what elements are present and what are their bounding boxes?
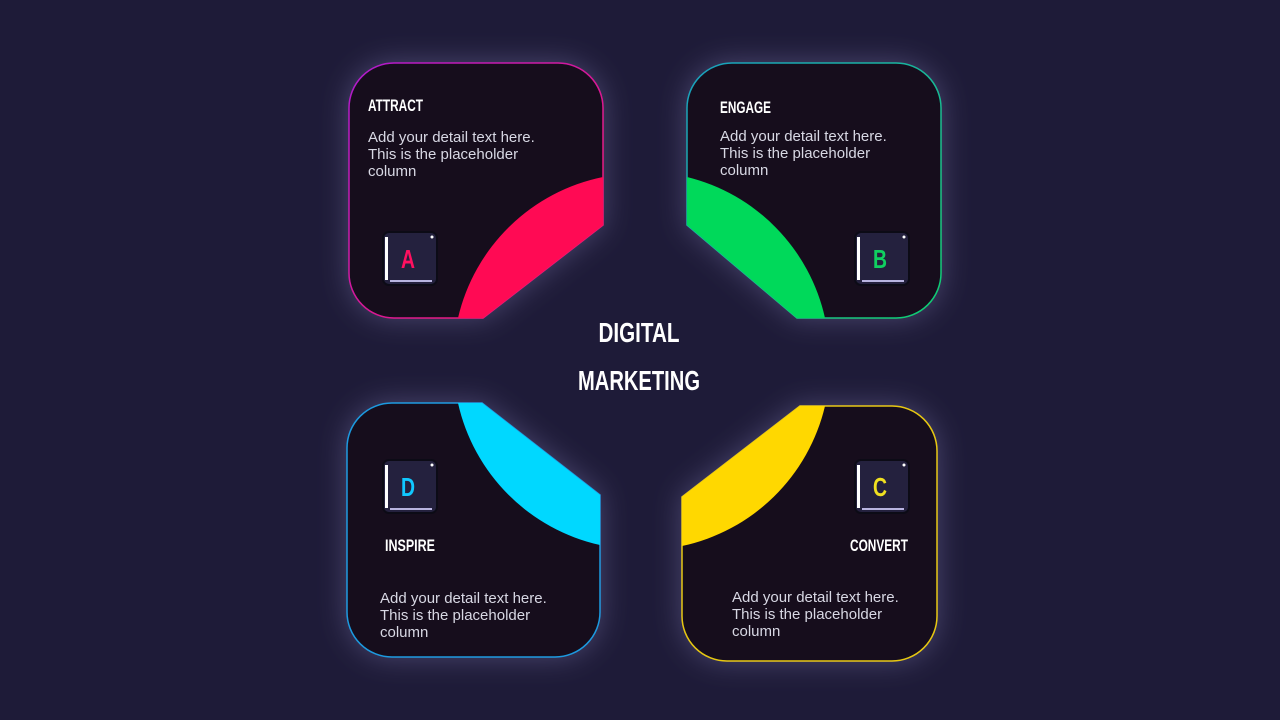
arc band: pink bbox=[458, 177, 603, 318]
heading: attract: ATTRACT bbox=[368, 96, 423, 115]
body text: inspire: Add your detail text here. bbox=[380, 590, 547, 607]
body text: engage: column bbox=[720, 162, 768, 179]
center title: MARKETING bbox=[578, 365, 700, 396]
card: convert bbox=[640, 360, 937, 661]
badge: D bbox=[383, 460, 437, 513]
badge: C: C bbox=[873, 472, 887, 502]
heading: inspire: INSPIRE bbox=[385, 536, 435, 555]
badge: A: A bbox=[401, 244, 415, 274]
body text: convert: This is the placeholder bbox=[732, 606, 882, 623]
badge: B: B bbox=[873, 244, 887, 274]
badge: A bbox=[383, 232, 437, 285]
body text: inspire: column bbox=[380, 624, 428, 641]
badge: B bbox=[855, 232, 909, 285]
body text: attract: Add your detail text here. bbox=[368, 129, 535, 146]
body text: engage: This is the placeholder bbox=[720, 145, 870, 162]
badge: C bbox=[855, 460, 909, 513]
center title: DIGITAL bbox=[598, 317, 680, 348]
body text: convert: Add your detail text here. bbox=[732, 589, 899, 606]
card: engage bbox=[672, 48, 956, 332]
heading: convert: CONVERT bbox=[850, 536, 908, 555]
body text: inspire: This is the placeholder bbox=[380, 607, 530, 624]
body text: engage: Add your detail text here. bbox=[720, 128, 887, 145]
body text: attract: column bbox=[368, 163, 416, 180]
arc band: green bbox=[687, 177, 825, 318]
arc band: cyan bbox=[458, 403, 600, 545]
heading: engage: ENGAGE bbox=[720, 98, 771, 117]
badge: D: D bbox=[401, 472, 415, 502]
body text: attract: This is the placeholder bbox=[368, 146, 518, 163]
body text: convert: column bbox=[732, 623, 780, 640]
arc band: yellow bbox=[682, 406, 825, 546]
card: attract bbox=[349, 63, 640, 360]
center title bbox=[578, 317, 700, 396]
card: inspire bbox=[347, 360, 640, 657]
